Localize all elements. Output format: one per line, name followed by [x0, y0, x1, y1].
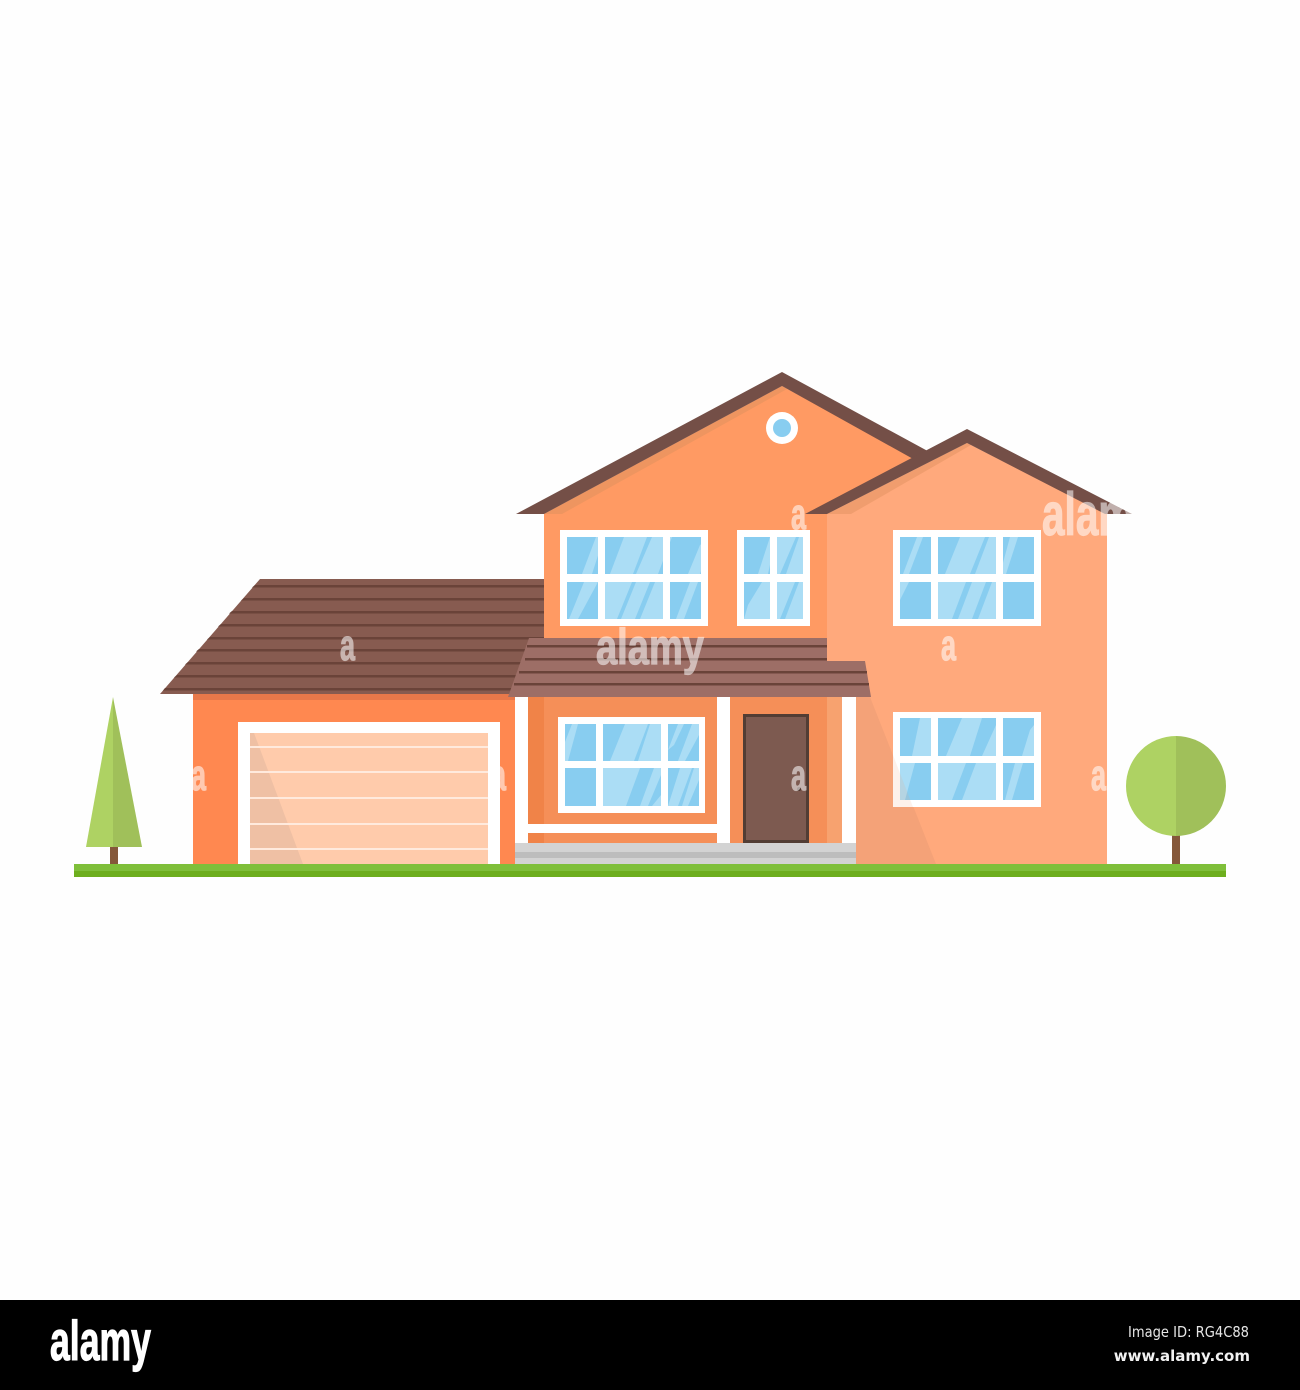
ground strip	[74, 864, 1226, 877]
front door	[743, 714, 809, 843]
upper middle window	[737, 530, 810, 626]
garage door	[238, 722, 500, 864]
garage wall	[193, 694, 515, 864]
main upper storey wall	[544, 386, 925, 645]
footer bar	[0, 1300, 1300, 1390]
porch rail	[528, 824, 717, 833]
watermarks	[191, 481, 1157, 800]
right wing wall	[827, 443, 1107, 864]
round tree	[1126, 736, 1226, 865]
cone tree	[86, 697, 142, 865]
lower right window	[893, 712, 1041, 807]
watermarks: a	[340, 621, 355, 670]
round attic window	[766, 412, 798, 444]
watermarks: alamy	[596, 619, 704, 675]
watermarks: a	[941, 621, 956, 670]
upper right window	[893, 530, 1041, 626]
garage roof with shingles	[160, 579, 544, 694]
right wing gable roof	[805, 429, 1132, 514]
watermarks: a	[791, 751, 806, 800]
porch roof with shingles	[508, 638, 871, 697]
watermarks: a	[791, 490, 806, 539]
porch steps	[515, 843, 856, 864]
watermarks: alamy	[1042, 481, 1157, 548]
porch columns	[515, 697, 856, 843]
watermarks: a	[191, 751, 206, 800]
porch back wall	[515, 697, 856, 844]
upper left window	[560, 530, 712, 626]
porch window	[558, 717, 705, 813]
website url: www.alamy.com	[1114, 1347, 1250, 1365]
watermarks: a	[1091, 751, 1106, 800]
main gable roof	[516, 372, 935, 514]
image id: Image ID: RG4C88	[1128, 1323, 1249, 1341]
house infographic canvas	[0, 372, 1300, 1390]
footer logo: alamy	[50, 1309, 151, 1372]
shadow on right wing wall	[855, 697, 936, 864]
watermarks: a	[491, 751, 506, 800]
